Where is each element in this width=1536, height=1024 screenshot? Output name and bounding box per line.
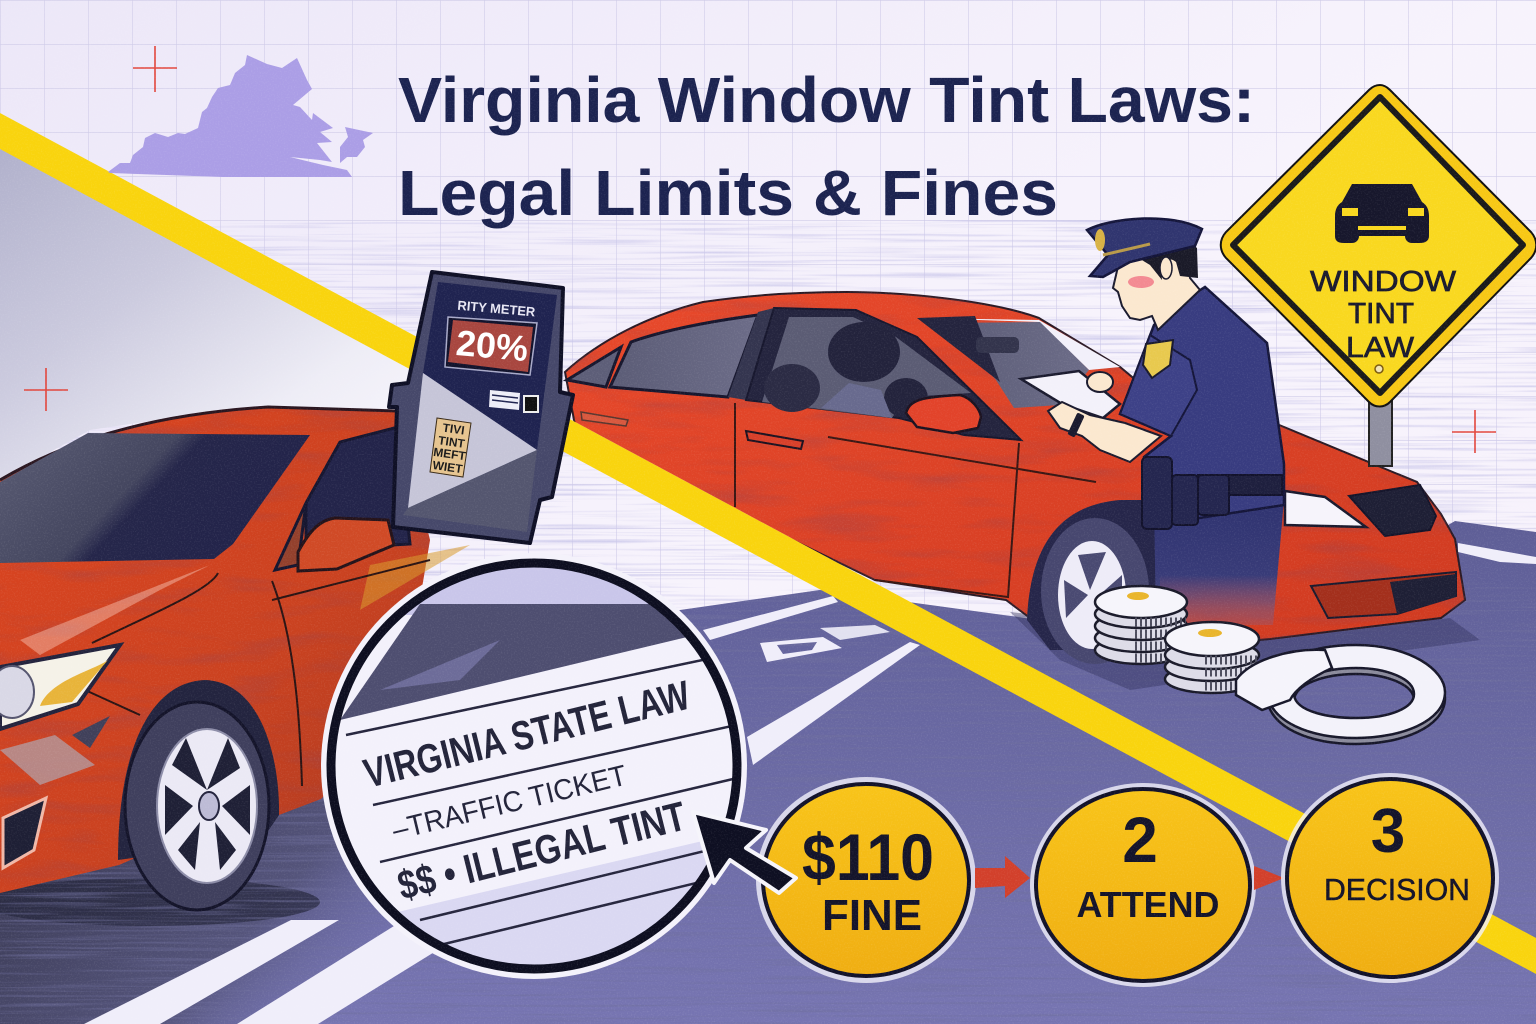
watch (1067, 412, 1085, 438)
writing hand (1087, 372, 1113, 392)
side marker (72, 716, 110, 748)
coin stack one (1095, 586, 1187, 664)
sign text (1310, 266, 1457, 364)
duty belt and holster (1142, 457, 1282, 529)
hat badge (1095, 229, 1105, 251)
sign text: WINDOW (1310, 266, 1457, 298)
light wedge (408, 373, 537, 508)
side window (306, 427, 410, 550)
dark window strip (340, 604, 686, 720)
officer forearm (1048, 402, 1161, 462)
lens text (359, 672, 695, 909)
quarter window (567, 347, 621, 387)
lens ring (331, 563, 737, 969)
officer ear (1160, 257, 1172, 279)
hood highlight (20, 565, 210, 655)
officer face and neck (1113, 245, 1200, 330)
meter sticker: WIET (432, 458, 464, 476)
officer sleeve (1120, 335, 1197, 436)
officer hat (1087, 218, 1202, 277)
road surface (0, 521, 1536, 1024)
yellow highlights on door (360, 545, 470, 610)
front wheel (1041, 518, 1149, 664)
meter sticker: TINT (437, 433, 466, 451)
lens text: VIRGINIA STATE LAW (359, 672, 695, 797)
side mirror (298, 518, 394, 571)
road markings (84, 543, 1536, 1024)
rear door handle (581, 412, 628, 426)
car body (0, 407, 430, 893)
officer hair (1137, 244, 1198, 280)
cheek (1128, 276, 1154, 288)
side mirror (906, 395, 981, 433)
button (524, 396, 538, 412)
sign text: LAW (1346, 332, 1415, 364)
attend coin: ATTEND (1076, 884, 1220, 925)
arrow: attend to decision (1254, 866, 1284, 890)
coin stack two (1165, 622, 1259, 693)
arrow: fine to attend (975, 856, 1030, 898)
meter sticker: TIVI (442, 421, 465, 438)
title (398, 64, 1255, 229)
title: Virginia Window Tint Laws: (398, 64, 1255, 136)
sign text: TINT (1348, 298, 1414, 330)
lens text: $$ • ILLEGAL TINT (393, 793, 690, 909)
front door window frame (746, 308, 1021, 440)
meter sticker (430, 418, 471, 477)
device face (423, 282, 557, 450)
attend coin (1030, 783, 1256, 987)
attend coin: 2 (1122, 804, 1158, 876)
left red car (0, 400, 470, 910)
dark wedge (403, 450, 537, 532)
car grille (1349, 485, 1436, 536)
cursor arrow (693, 812, 796, 893)
fog lamp (3, 798, 46, 868)
right red car (560, 290, 1470, 664)
body creases (85, 560, 430, 786)
shadow beneath right car (1010, 612, 1480, 690)
windshield (0, 433, 310, 563)
shoulder badge (1143, 340, 1173, 378)
rear window (610, 315, 758, 397)
wheel arch (118, 680, 279, 860)
vent (489, 390, 520, 410)
front door glass (762, 317, 971, 418)
fine coin (756, 777, 976, 983)
device screen (445, 317, 537, 375)
fine coin: FINE (822, 891, 922, 940)
decision coin: DECISION (1324, 872, 1470, 907)
officer torso (1120, 287, 1284, 525)
police officer (1021, 218, 1284, 625)
headlight (0, 645, 120, 729)
hat band (1103, 244, 1150, 255)
tyre (125, 702, 269, 910)
door lines (735, 403, 1096, 597)
front door handle (746, 431, 803, 449)
lower grille (1311, 572, 1456, 618)
meter sticker: MEFT (432, 445, 467, 463)
officer trousers (1154, 500, 1284, 625)
alloy rim (157, 729, 257, 883)
magnifier (320, 553, 750, 979)
windshield (917, 316, 1120, 408)
car body (565, 292, 1465, 650)
car headlight (1285, 491, 1366, 527)
decision coin (1281, 773, 1499, 983)
reading: 20% (454, 322, 530, 369)
passengers (764, 322, 928, 418)
map: Virginia state (108, 55, 373, 177)
lens text: –TRAFFIC TICKET (389, 760, 630, 847)
tint meter device (389, 272, 573, 543)
fine coin: $110 (802, 820, 934, 894)
lens paper (340, 568, 732, 964)
licence plate reflection (0, 735, 95, 785)
clipboard (1021, 371, 1120, 418)
window tint law road sign (1221, 85, 1536, 406)
quarter panel window (275, 503, 306, 570)
handcuffs (1236, 645, 1445, 744)
title: Legal Limits & Fines (398, 157, 1058, 229)
grey shaded area upper left (0, 145, 420, 480)
red crosshair marks (24, 46, 1496, 453)
decision coin: 3 (1371, 797, 1405, 866)
meter label: RITY METER (457, 298, 536, 319)
icon: car (1335, 184, 1429, 243)
door pillar (728, 308, 774, 400)
sign post (1369, 400, 1392, 466)
stacks of coins (1095, 586, 1259, 693)
ruled lines (346, 650, 750, 945)
front wheel arch (1027, 500, 1160, 650)
